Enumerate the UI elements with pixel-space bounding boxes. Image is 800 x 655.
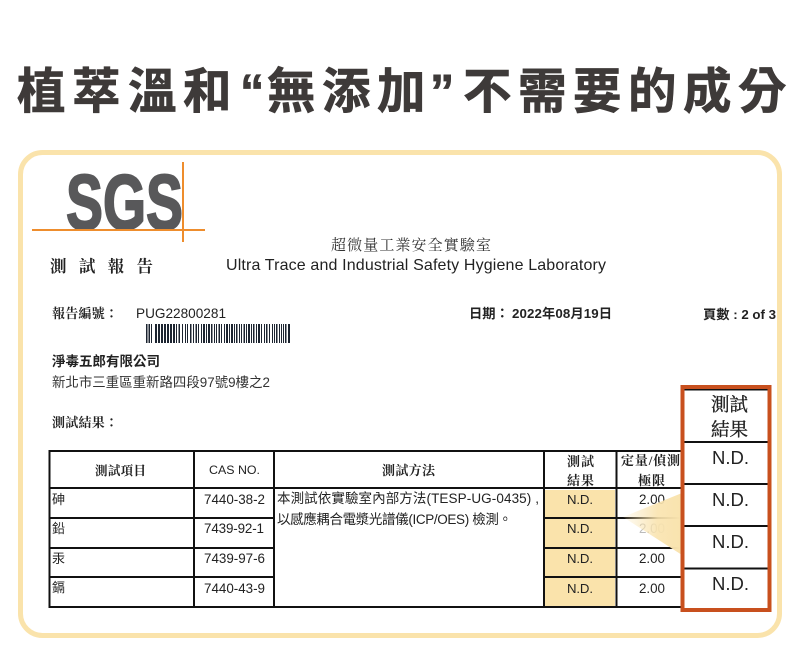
table header: CAS NO.	[209, 463, 260, 477]
lab name English: Ultra Trace and Industrial Safety Hygiene Laboratory	[226, 257, 606, 274]
results values: N.D.	[567, 581, 593, 596]
barcode	[146, 324, 290, 343]
results values: N.D.	[567, 492, 593, 507]
CAS numbers: 7440-43-9	[204, 581, 265, 596]
callout values	[712, 447, 749, 594]
callout values: N.D.	[712, 447, 749, 468]
SGS logo: SGS	[66, 158, 183, 246]
test method text	[277, 490, 539, 527]
callout header: 結果	[711, 420, 748, 441]
limit values: 2.00	[639, 551, 665, 566]
title: 植萃溫和“無添加”不需要的成分	[17, 65, 787, 119]
table header: 定量/偵測	[621, 453, 680, 469]
date: 2022年08月19日	[512, 305, 612, 321]
callout header: 測試	[711, 395, 748, 416]
table header	[95, 453, 680, 488]
report number	[52, 306, 226, 321]
table row labels: 鎘	[52, 580, 65, 595]
results values	[567, 492, 593, 596]
test method text: 本測試依實驗室內部方法(TESP-UG-0435) ,	[277, 490, 539, 506]
company address: 新北市三重區重新路四段97號9樓之2	[52, 374, 270, 390]
table grid	[48, 450, 681, 608]
table header: 結果	[567, 473, 594, 488]
callout header	[711, 395, 748, 441]
CAS numbers	[204, 492, 265, 596]
lab name Chinese: 超微量工業安全實驗室	[331, 236, 491, 254]
results table	[48, 450, 681, 608]
CAS numbers: 7439-97-6	[204, 551, 265, 566]
company name: 淨毒五郎有限公司	[52, 353, 160, 369]
CAS numbers: 7439-92-1	[204, 521, 264, 536]
page number: 頁數 : 2 of 3	[703, 307, 776, 322]
table row labels: 汞	[52, 551, 65, 566]
table header: 極限	[638, 473, 665, 488]
report heading: 測 試 報 告	[50, 256, 153, 276]
limit values: 2.00	[639, 581, 665, 596]
table header: 測試項目	[95, 463, 146, 478]
results values: N.D.	[567, 521, 593, 536]
callout: enlarged test results	[682, 387, 770, 610]
CAS numbers: 7440-38-2	[204, 492, 265, 507]
callout pointer	[623, 493, 682, 555]
highlighted result cells	[545, 490, 615, 606]
table row labels: 砷	[52, 492, 65, 507]
limit values: 2.00	[639, 492, 665, 507]
table header: 測試方法	[382, 463, 436, 478]
callout values: N.D.	[712, 531, 749, 552]
date: 日期：	[469, 306, 509, 321]
test results label: 測試結果：	[52, 415, 118, 430]
table row labels	[52, 492, 65, 595]
table header: 測試	[567, 454, 594, 469]
report number: PUG22800281	[136, 306, 226, 321]
panel: report card	[20, 152, 780, 636]
callout values: N.D.	[712, 573, 749, 594]
results values: N.D.	[567, 551, 593, 566]
table row labels: 鉛	[52, 521, 65, 536]
limit values: 2.00	[639, 521, 665, 536]
test method text: 以感應耦合電漿光譜儀(ICP/OES) 檢測。	[277, 511, 512, 527]
report number: 報告編號：	[52, 306, 118, 321]
date	[469, 305, 612, 321]
limit values	[639, 492, 665, 596]
callout values: N.D.	[712, 489, 749, 510]
